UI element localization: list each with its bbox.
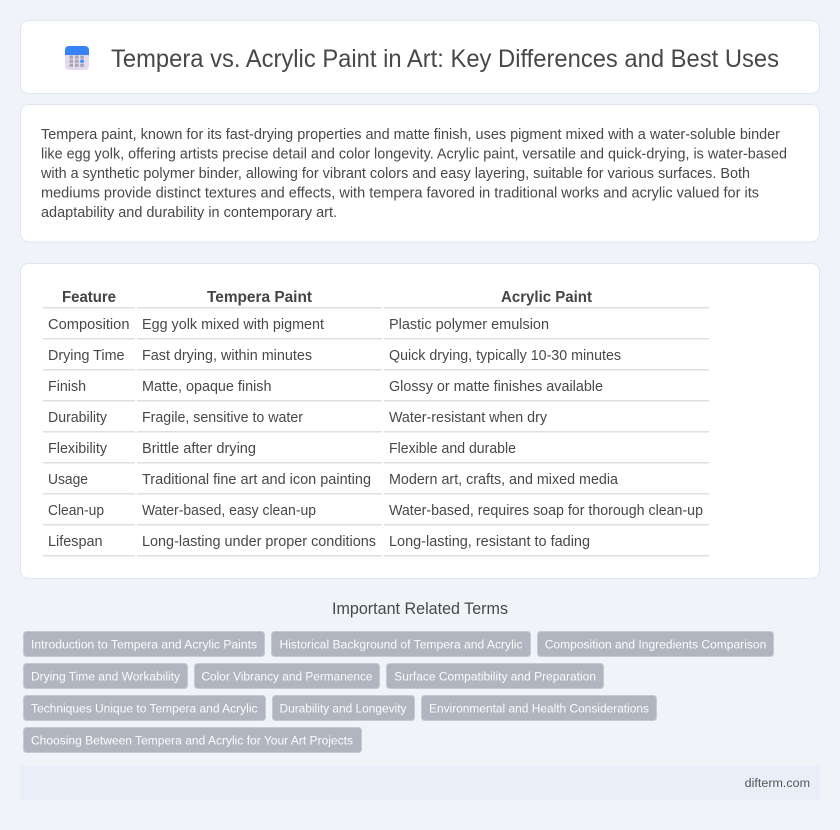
text block: introduction paragraph: mediums provide distinct textures and effects, with tempera favored in traditional works and acrylic valued for its [41, 186, 759, 202]
title: Tempera vs. Acrylic Paint in Art: Key Differences and Best Uses [111, 46, 779, 73]
table header row: Feature [62, 289, 116, 306]
chip: Composition and Ingredients Comparison [545, 637, 766, 651]
row: clean-up [48, 503, 703, 519]
chip [386, 664, 604, 688]
row: composition: Egg yolk mixed with pigment [142, 317, 324, 333]
icon: calendar palette [65, 46, 89, 70]
panel: introduction [20, 104, 820, 242]
table header row [62, 289, 592, 306]
row: clean-up: Water-based, easy clean-up [142, 503, 316, 519]
chip [194, 664, 380, 688]
row: finish [48, 379, 603, 395]
row: lifespan: Long-lasting under proper conditions [142, 534, 376, 550]
chip [24, 664, 188, 688]
text block: introduction paragraph: adaptability and durability in contemporary art. [41, 205, 337, 221]
row: finish: Matte, opaque finish [142, 379, 272, 395]
row: lifespan: Lifespan [48, 534, 102, 550]
row: composition: Plastic polymer emulsion [389, 317, 549, 333]
row: flexibility: Flexible and durable [389, 441, 516, 457]
row: drying time [48, 348, 621, 364]
row: drying time: Fast drying, within minutes [142, 348, 312, 364]
row: drying time: Quick drying, typically 10-30 minutes [389, 348, 621, 364]
row: composition: Composition [48, 317, 130, 333]
row: flexibility: Brittle after drying [142, 441, 256, 457]
row: finish: Glossy or matte finishes available [389, 379, 603, 395]
text block: introduction paragraph: with a synthetic polymer binder, allowing for vibrant colors and easy layering, suitable for various surfaces. Both [40, 166, 750, 182]
chip: Durability and Longevity [280, 701, 407, 715]
panel: footer [20, 766, 820, 800]
chip: Choosing Between Tempera and Acrylic for Your Art Projects [31, 733, 353, 747]
chip: Introduction to Tempera and Acrylic Paints [31, 637, 257, 651]
heading: important related terms: Important Related Terms [332, 600, 508, 618]
footer source text: difterm.com [745, 776, 810, 790]
text block: introduction paragraph: Tempera paint, known for its fast-drying properties and matte finish, uses pigment mixed with a water-soluble binder [41, 127, 780, 143]
row: clean-up: Clean-up [48, 503, 104, 519]
row: finish: Finish [48, 379, 86, 395]
row: clean-up: Water-based, requires soap for thorough clean-up [389, 503, 703, 519]
row: flexibility [48, 441, 516, 457]
row: lifespan: Long-lasting, resistant to fading [389, 534, 590, 550]
table header row: Acrylic Paint [501, 289, 592, 306]
row: usage [48, 472, 619, 488]
text block: introduction paragraph: like egg yolk, offering artists precise detail and color longevity. Acrylic paint, versatile and quick-drying, is water-based [41, 146, 787, 162]
text block: introduction paragraph [40, 127, 787, 221]
chip: Drying Time and Workability [31, 669, 181, 683]
row: flexibility: Flexibility [48, 441, 108, 457]
chip: Color Vibrancy and Permanence [202, 669, 373, 683]
row: usage: Traditional fine art and icon painting [142, 472, 371, 488]
chip [272, 696, 414, 720]
panel: comparison table [20, 264, 820, 578]
row: durability [48, 410, 548, 426]
row: durability: Water-resistant when dry [389, 410, 548, 426]
row: usage: Modern art, crafts, and mixed media [389, 472, 619, 488]
chip: Historical Background of Tempera and Acrylic [280, 637, 522, 651]
table header row: Tempera Paint [207, 289, 312, 306]
row: usage: Usage [48, 472, 88, 488]
panel: header [20, 20, 820, 94]
chip [24, 632, 264, 656]
chip [24, 696, 266, 720]
chip [24, 728, 362, 752]
row: lifespan [48, 534, 590, 550]
row: composition [48, 317, 549, 333]
row: drying time: Drying Time [48, 348, 124, 364]
chip [538, 632, 774, 656]
chip: Surface Compatibility and Preparation [394, 669, 596, 683]
row: durability: Fragile, sensitive to water [142, 410, 303, 426]
row: durability: Durability [48, 410, 108, 426]
chip: Techniques Unique to Tempera and Acrylic [31, 701, 258, 715]
panel: related term chips [24, 632, 774, 752]
chip [422, 696, 656, 720]
chip [272, 632, 530, 656]
chip: Environmental and Health Considerations [429, 701, 649, 715]
